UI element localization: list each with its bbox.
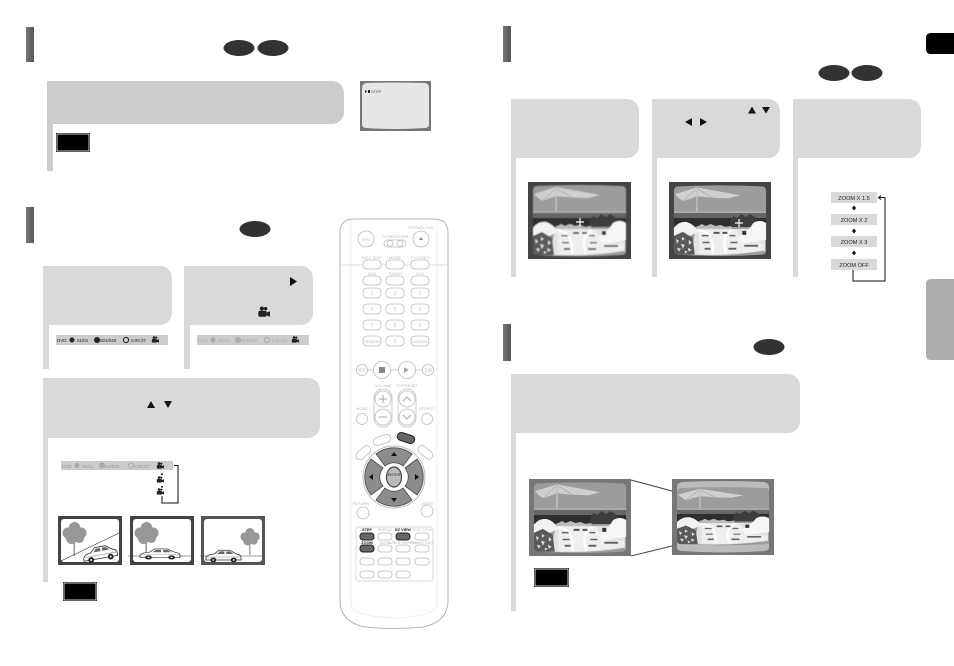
language tab [926,33,954,54]
info bar: angle selection: 001/040 [103,464,120,469]
remote: return and mute: RETURN [353,501,369,506]
photo: zoom position 1 [528,182,631,259]
info bar: dark status: DVD [57,338,67,343]
screen: angle view 2 [128,516,194,565]
remote: function buttons: SLOW [379,541,391,545]
zoom level list: ZOOM X 3 [841,240,867,246]
info bar: angle selection [61,461,173,470]
remote: function buttons: REPEAT [378,528,393,532]
screen: angle view 1 [58,516,122,565]
remote: number buttons: DISC SKIP [362,255,382,260]
remote: number buttons: MODE [389,255,401,260]
disc badges: zoom [818,65,882,81]
remote: function buttons: TUNER MEMORY [387,541,419,545]
photo: EZ view before [529,479,631,556]
info bar: dim status: DVD [198,338,208,343]
disc badges: step [224,40,288,56]
info bar: dim status [197,335,309,345]
arrow: angle cycle [162,466,178,503]
remote: number buttons: 5 [394,307,397,313]
remote: volume and tuning: VOLUME [375,383,392,388]
remote: direction pad [363,446,425,508]
screen: step on TV: STEP [371,89,382,94]
screen: angle view 3 [200,516,265,565]
zoom level list [831,192,877,270]
heading bar: EZ view [503,324,511,361]
remote: number buttons: 8 [394,323,397,329]
zoom level list: ZOOM OFF [839,263,869,269]
panel: angle step 1 [43,266,172,369]
remote control [340,219,448,628]
remote: volume and tuning: MODE [356,406,368,411]
panel: angle step 2 [184,266,313,369]
remote: number buttons: 9 [419,323,422,329]
remote: menu buttons [354,431,434,461]
remote: number buttons: CANCEL [412,339,429,344]
remote: number buttons: DVD [368,271,376,276]
remote: number buttons: 2 [394,291,397,297]
remote: return and mute [353,501,434,519]
remote: number buttons: TV/VIDEO [411,255,429,260]
photo: EZ view after [672,479,774,555]
remote: function buttons [356,527,434,581]
remote: number buttons [362,255,429,346]
zoom level list: ZOOM X 1.5 [838,196,870,202]
info bar: dark status: 001/040 [100,338,117,343]
remote: function buttons: SOUND EDIT [410,541,434,545]
remote: number buttons: REMAIN [364,339,380,344]
remote: volume and tuning: EFFECT [419,406,435,411]
note badge: EZ view [534,568,569,587]
remote: return and mute: MUTE [422,501,434,506]
remote: number buttons: 4 [371,307,374,313]
remote: function buttons: STEP [362,528,372,532]
info bar: angle selection: DVD [62,464,72,469]
heading bar: step function [26,27,34,62]
disc badge: EZ view [754,339,784,355]
info bar: dim status: 01/01 [218,338,230,343]
remote: power and open buttons: DVD [362,237,370,242]
remote: number buttons: 6 [419,307,422,313]
remote: function buttons: TEST TONE [411,528,433,532]
heading bar: zoom function [503,26,511,62]
panel: angle step 3 [43,378,320,582]
arrow: zoom cycle [853,196,885,281]
remote: number buttons: 3 [419,291,422,297]
remote: power and open buttons: TV RECEIVER [382,234,408,239]
info bar: angle selection: 0:00:37 [134,464,150,469]
info bar: angle selection: 01/01 [82,464,94,469]
panel: zoom step 2 [652,99,780,277]
remote: function buttons: EZ VIEW [395,528,411,532]
note badge: step [56,133,90,152]
connector lines [631,480,672,556]
info bar: dark status: 01/01 [77,338,89,343]
screen: step on TV [360,81,431,131]
remote: power and open buttons: OPEN/CLOSE [408,225,434,230]
panel: zoom step 1 [511,99,639,277]
panel: step instruction [47,81,344,171]
remote: number buttons: TUNER [388,271,402,276]
zoom level list: ZOOM X 2 [841,218,867,224]
icon: angle options [157,474,164,495]
section tab [926,279,954,360]
info bar: dim status: 001/040 [241,338,258,343]
panel: zoom step 3 [793,99,921,277]
remote: volume and tuning: TV/PRESET [396,383,419,388]
remote: volume and tuning [356,383,435,427]
remote: direction pad: ENTER [388,473,401,477]
note badge: angle [63,582,97,601]
photo: zoom position 2 [669,182,771,259]
remote: function buttons: ZOOM [361,541,373,545]
remote: number buttons: 0 [394,339,397,345]
remote: number buttons: 7 [371,323,374,329]
panel: EZ view instruction [511,374,800,611]
disc badge: angle [240,221,270,237]
info bar: dim status: 0:00:37 [272,338,288,343]
remote: number buttons: 1 [371,291,374,297]
remote: number buttons: AUX [416,271,424,276]
remote: transport buttons [356,362,434,378]
info bar: dark status: 0:00:37 [131,338,147,343]
remote: power and open buttons [358,225,434,247]
info bar: dark status [56,335,168,345]
heading bar: angle function [26,207,34,243]
